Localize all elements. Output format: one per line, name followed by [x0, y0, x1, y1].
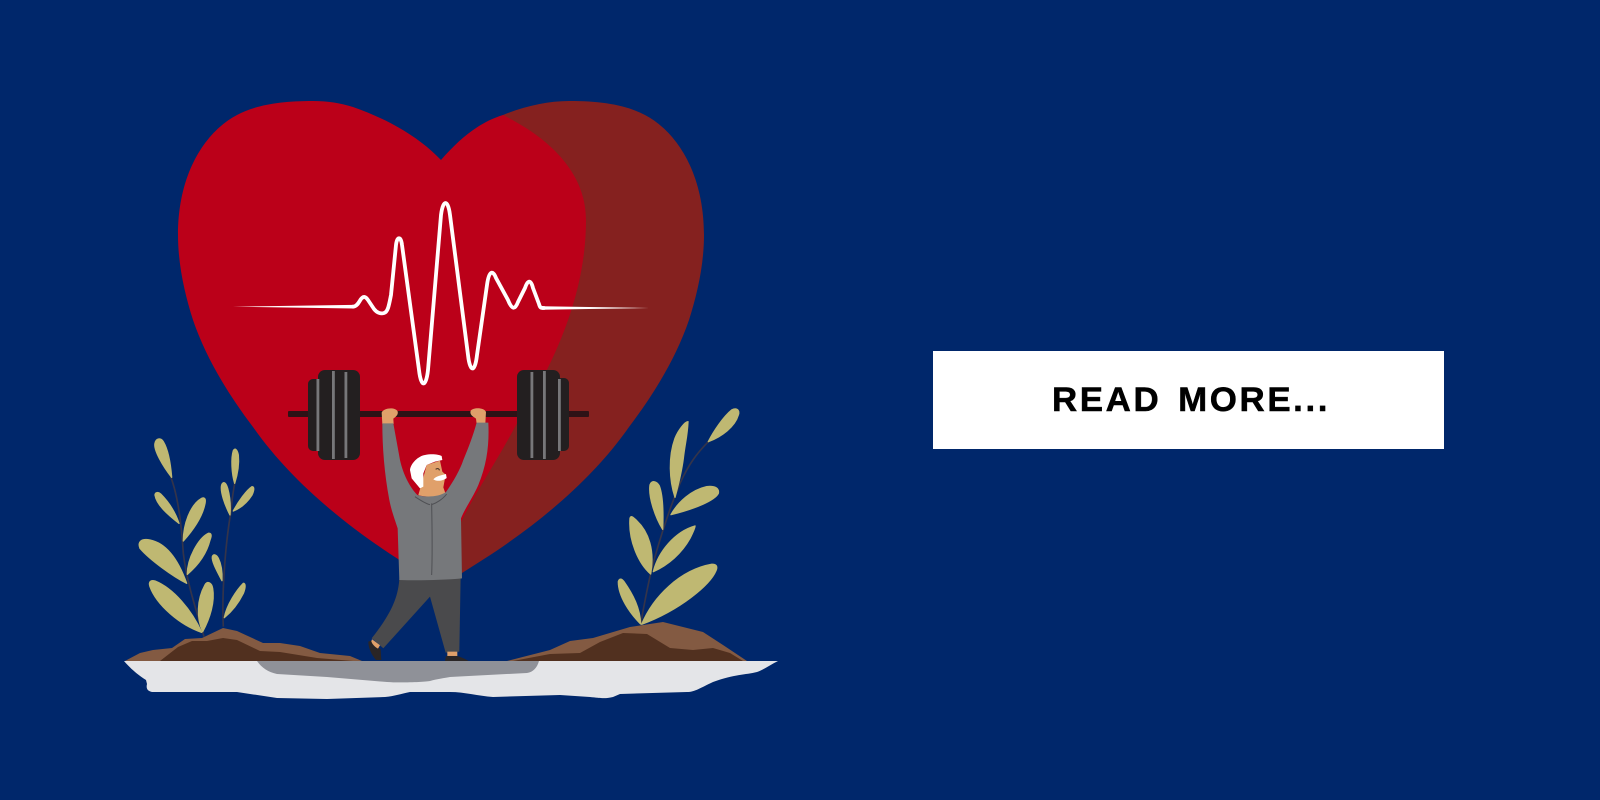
trousers [372, 577, 461, 653]
hair [410, 454, 442, 488]
ground shadow [257, 661, 539, 682]
neck and face [418, 461, 446, 497]
plant: right sprig [618, 409, 739, 624]
jacket [382, 423, 489, 580]
ground slab [124, 661, 778, 699]
illustration: heart, barbell and lifter [124, 101, 778, 699]
right stem [641, 442, 708, 624]
button: read more [933, 351, 1444, 449]
hands [382, 408, 486, 424]
right leaves [618, 409, 739, 624]
barbell [288, 370, 589, 460]
figure: man lifting barbell [368, 408, 489, 661]
left leaves [139, 439, 254, 632]
button label: READ MORE... [1052, 381, 1330, 419]
ankles [371, 639, 457, 656]
left stems [171, 477, 235, 637]
moustache [433, 474, 447, 481]
heart shadow: dark red back heart [420, 101, 704, 592]
plant: left sprigs [139, 439, 254, 637]
jacket seams [415, 494, 447, 575]
mound: right soil [507, 622, 747, 661]
shoes [368, 641, 469, 661]
eye [436, 469, 439, 470]
heart: bright red front heart [178, 101, 586, 590]
heartbeat line [233, 203, 649, 384]
mound: left soil [125, 628, 362, 661]
